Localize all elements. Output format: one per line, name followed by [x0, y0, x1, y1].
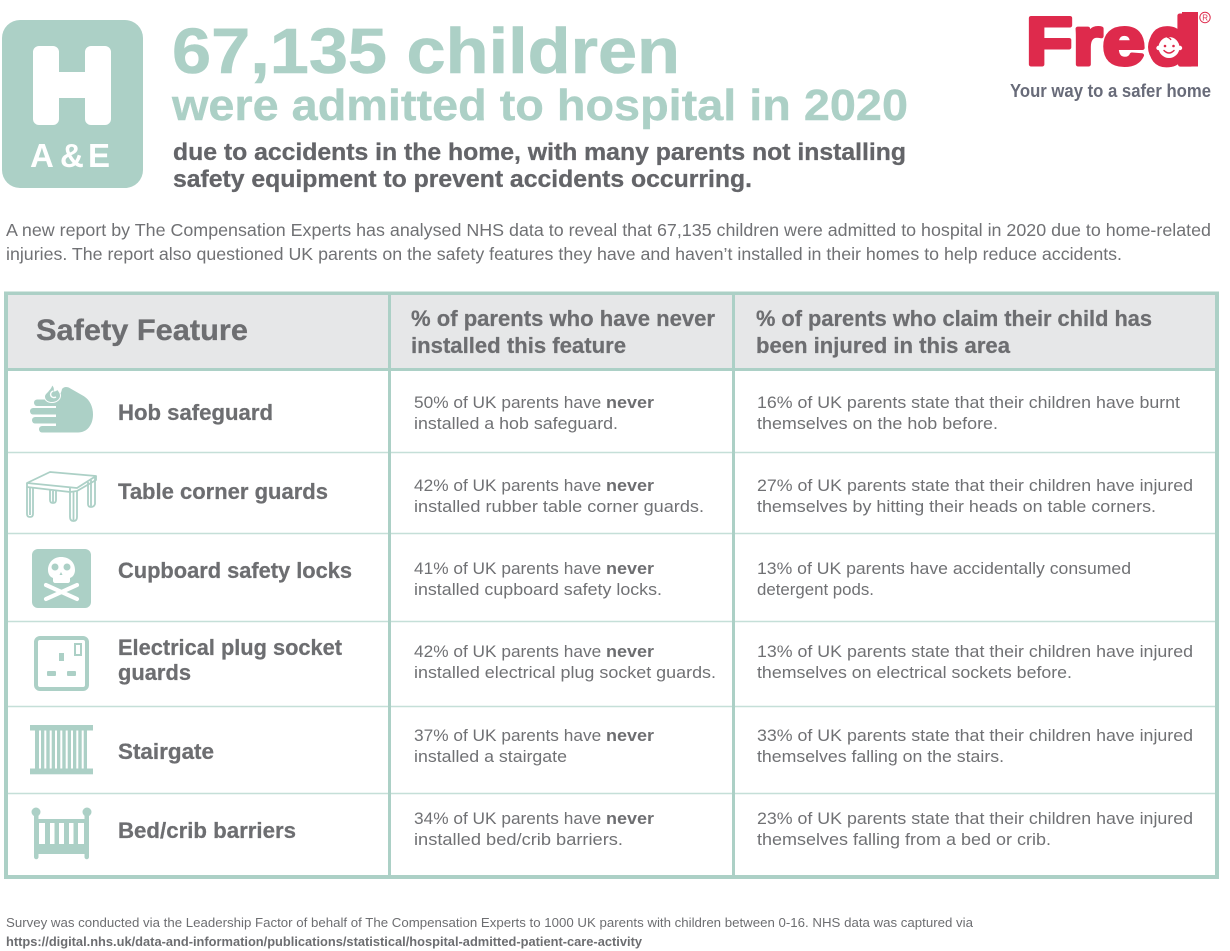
- text: stairgate never installed: installed a stairgate: [414, 747, 567, 766]
- text: crib never installed: [414, 809, 654, 849]
- text: table injured: [757, 476, 1193, 516]
- icon: plug socket: [36, 638, 87, 689]
- label: electrical plug socket guards: [118, 635, 343, 685]
- label: electrical plug socket guards: guards: [118, 660, 191, 685]
- text: table injured: 27% of UK parents state that their children have injured: [757, 476, 1193, 495]
- footnote: survey source: [6, 915, 974, 949]
- text: hob never installed: never: [606, 393, 654, 412]
- heading: child injured column: % of parents who claim their child has: [756, 306, 1152, 331]
- text: socket never installed: installed electrical plug socket guards.: [414, 663, 716, 682]
- icon: A&E hospital sign: A: [30, 137, 54, 174]
- text: stairgate never installed: never: [606, 726, 654, 745]
- text: cupboard injured: [757, 559, 1131, 599]
- text: stairgate never installed: 37% of UK parents have: [414, 726, 606, 745]
- table header background: [7, 294, 1216, 369]
- logo: Fred: [1026, 4, 1210, 80]
- logo: Fred: Fre: [1026, 4, 1145, 80]
- icon: A&E hospital sign: &: [60, 137, 84, 174]
- heading: never installed column: % of parents who have never: [411, 306, 715, 331]
- subtitle: [173, 139, 906, 193]
- text: socket never installed: never: [606, 642, 654, 661]
- heading: child injured column: [756, 306, 1152, 358]
- icon: burnt hand: [30, 384, 93, 432]
- row: cupboard safety locks: [32, 549, 1131, 608]
- text: cupboard never installed: never: [606, 559, 654, 578]
- text: stairgate never installed: [414, 726, 654, 766]
- text: cupboard never installed: [414, 559, 662, 599]
- subtitle: safety equipment to prevent accidents occurring.: [173, 166, 752, 193]
- panel: safety feature table: [4, 292, 1219, 879]
- text: hob injured: [757, 393, 1180, 433]
- text: cupboard never installed: 41% of UK parents have: [414, 559, 606, 578]
- text: crib injured: [757, 809, 1193, 849]
- label: cupboard safety locks: Cupboard safety locks: [118, 558, 352, 583]
- logo tagline: Your way to a safer home: [1010, 81, 1211, 101]
- footnote: survey source: https://digital.nhs.uk/data-and-information/publications/statistical/hospital-admitted-patient-care-activity: [6, 934, 643, 949]
- text: stairgate injured: 33% of UK parents state that their children have injured: [757, 726, 1193, 745]
- text: table never installed: 42% of UK parents have: [414, 476, 606, 495]
- text: table never installed: [414, 476, 704, 516]
- row: electrical plug socket guards: [36, 635, 1193, 689]
- text: socket never installed: 42% of UK parents have: [414, 642, 606, 661]
- label: bed/crib barriers: Bed/crib barriers: [118, 818, 296, 843]
- label: stairgate: Stairgate: [118, 739, 214, 764]
- label: electrical plug socket guards: Electrical plug socket: [118, 635, 343, 660]
- logo: Fred: d: [1148, 4, 1196, 80]
- text: crib never installed: never: [606, 809, 654, 828]
- subtitle: due to accidents in the home, with many parents not installing: [173, 139, 906, 166]
- text: hob never installed: 50% of UK parents have: [414, 393, 606, 412]
- text: crib never installed: 34% of UK parents have: [414, 809, 606, 828]
- text: socket injured: 13% of UK parents state that their children have injured: [757, 642, 1193, 661]
- intro paragraph: injuries. The report also questioned UK parents on the safety features they have and haven’t installed in their homes to help reduce accidents.: [6, 244, 1122, 264]
- intro paragraph: [6, 220, 1211, 264]
- heading: never installed column: installed this feature: [411, 333, 626, 358]
- icon: skull and crossbones: [32, 549, 91, 608]
- text: socket never installed: [414, 642, 716, 682]
- footnote: survey source: Survey was conducted via the Leadership Factor of behalf of The Compensation Experts to 1000 UK parents with children between 0-16. NHS data was captured via: [6, 915, 974, 930]
- text: table never installed: installed rubber table corner guards.: [414, 497, 704, 516]
- icon: crib: [32, 808, 92, 859]
- text: table never installed: never: [606, 476, 654, 495]
- text: crib injured: 23% of UK parents state that their children have injured: [757, 809, 1193, 828]
- title: were admitted to hospital in 2020: [171, 81, 908, 130]
- heading: child injured column: been injured in this area: [756, 333, 1011, 358]
- text: socket injured: [757, 642, 1193, 682]
- title: 67,135 children: [172, 15, 680, 87]
- text: hob injured: themselves on the hob before.: [757, 414, 998, 433]
- label: hob safeguard: Hob safeguard: [118, 400, 273, 425]
- row: table corner guards: [27, 472, 1193, 521]
- text: cupboard injured: 13% of UK parents have accidentally consumed: [757, 559, 1131, 578]
- icon: A&E hospital sign: E: [88, 137, 110, 174]
- row: hob safeguard: [30, 384, 1180, 433]
- intro paragraph: A new report by The Compensation Experts has analysed NHS data to reveal that 67,135 children were admitted to hospital in 2020 due to home-related: [6, 220, 1211, 240]
- text: stairgate injured: themselves falling on the stairs.: [757, 747, 1004, 766]
- heading: safety feature: Safety Feature: [36, 314, 248, 347]
- icon: stairgate: [30, 725, 93, 774]
- text: cupboard injured: detergent pods.: [757, 580, 874, 599]
- label: table corner guards: Table corner guards: [118, 479, 328, 504]
- row: stairgate: [30, 725, 1193, 774]
- text: hob never installed: [414, 393, 654, 433]
- text: table injured: themselves by hitting their heads on table corners.: [757, 497, 1156, 516]
- text: socket injured: themselves on electrical sockets before.: [757, 663, 1072, 682]
- row: bed/crib barriers: [32, 808, 1193, 859]
- text: crib never installed: installed bed/crib barriers.: [414, 830, 623, 849]
- text: cupboard never installed: installed cupboard safety locks.: [414, 580, 662, 599]
- text: hob injured: 16% of UK parents state that their children have burnt: [757, 393, 1180, 412]
- logo: Fred: R: [1202, 14, 1208, 22]
- icon: A&E hospital sign: [2, 20, 143, 188]
- text: crib injured: themselves falling from a bed or crib.: [757, 830, 1051, 849]
- title: [171, 15, 908, 130]
- text: hob never installed: installed a hob safeguard.: [414, 414, 618, 433]
- icon: table: [27, 472, 96, 521]
- text: stairgate injured: [757, 726, 1193, 766]
- heading: never installed column: [411, 306, 715, 358]
